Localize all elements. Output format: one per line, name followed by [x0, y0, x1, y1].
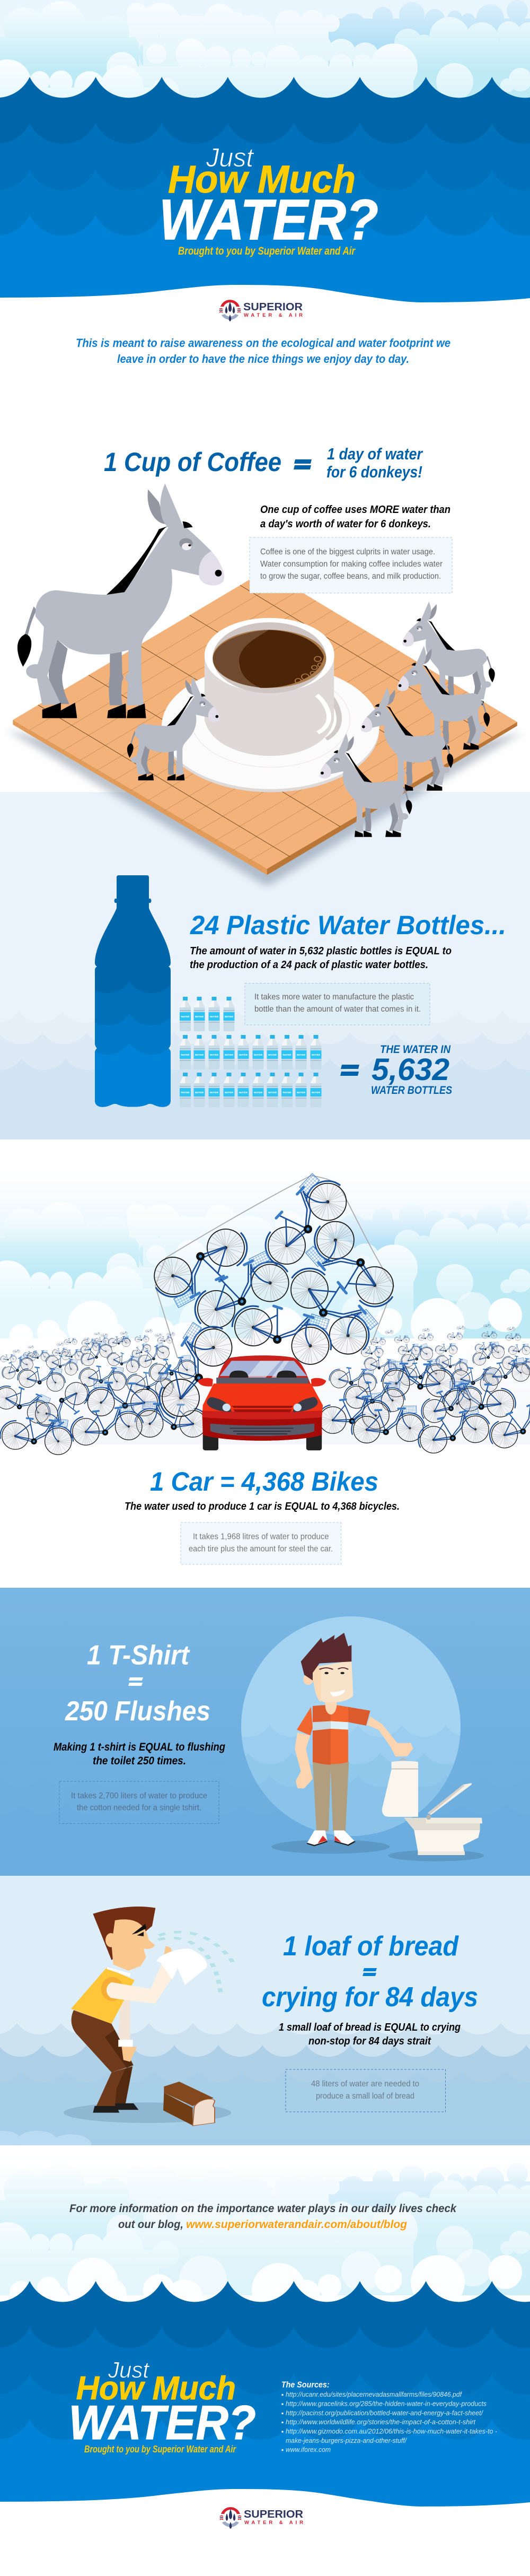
car section clouds — [0, 1198, 530, 1444]
coffee heading: for 6 donkeys! — [326, 463, 422, 481]
circle backdrop — [241, 1616, 461, 1836]
bread loaf — [163, 2082, 215, 2126]
title: Just — [206, 143, 254, 172]
callout: bottles: It takes more water to manufacture the plastic — [254, 993, 414, 1002]
near bike crowd — [0, 1361, 530, 1456]
toilet shadow — [388, 1850, 484, 1861]
placemat — [13, 570, 517, 875]
footer logo — [220, 2507, 304, 2529]
blog call to action: www.superiorwaterandair.com/about/blog — [186, 2218, 407, 2231]
saucer — [162, 664, 379, 792]
callout: t-shirt — [59, 1781, 219, 1824]
sources list: make-jeans-burgers-pizza-and-other-stuff/ — [286, 2437, 407, 2444]
footer title: Brought to you by Superior Water and Air — [84, 2444, 236, 2455]
bottles heading and text: The amount of water in 5,632 plastic bottles is EQUAL to — [190, 945, 452, 957]
bottles heading and text: the production of a 24 pack of plastic water bottles. — [190, 959, 428, 971]
sources list: http://www.gizmodo.com.au/2012/06/this-is-how-much-water-it-takes-to - — [286, 2427, 497, 2435]
blog call to action: out our blog, — [118, 2218, 183, 2231]
panel: bread background — [0, 1876, 530, 2145]
footer title: WATER? — [69, 2396, 256, 2450]
header sky and clouds — [0, 0, 530, 170]
bottles heading and text — [190, 910, 506, 971]
footer water waves — [0, 2281, 530, 2576]
title: How Much — [168, 158, 356, 201]
small donkey by the cup — [127, 677, 219, 780]
footer title: How Much — [76, 2370, 236, 2407]
coffee fact text: One cup of coffee uses MORE water than — [260, 504, 450, 516]
t-shirt text: Making 1 t-shirt is EQUAL to flushing — [54, 1741, 225, 1753]
icon: large water bottle — [95, 875, 171, 1107]
t-shirt text: 250 Flushes — [65, 1696, 210, 1727]
sources list — [281, 2381, 497, 2453]
blog call to action: For more information on the importance water plays in our daily lives check — [69, 2203, 457, 2215]
small bottles — [180, 997, 321, 1107]
bread text: 1 loaf of bread — [283, 1931, 459, 1962]
man — [71, 1907, 207, 2113]
callout: bread: produce a small loaf of bread — [316, 2092, 414, 2101]
small donkey 4 — [361, 687, 453, 791]
callout: coffee: to grow the sugar, coffee beans, and milk production. — [260, 572, 441, 581]
callout: car — [181, 1522, 341, 1564]
footer logo: SUPERIOR — [244, 2509, 304, 2520]
bread text: 1 small loaf of bread is EQUAL to crying — [279, 2022, 461, 2033]
car heading and text: 1 Car = 4,368 Bikes — [150, 1467, 378, 1496]
coffee fact text: a day's worth of water for 6 donkeys. — [260, 518, 431, 530]
footer logo: WATER & AIR — [244, 2520, 303, 2526]
sources list: The Sources: — [281, 2381, 330, 2390]
callout: car: It takes 1,968 litres of water to produce — [193, 1532, 329, 1542]
callout: t-shirt: It takes 2,700 liters of water to produce — [71, 1791, 207, 1800]
coffee heading — [104, 445, 423, 481]
small donkey 2 — [402, 602, 495, 705]
bottles stat: WATER BOTTLES — [371, 1084, 452, 1096]
icon: red car — [198, 1355, 326, 1450]
callout: bread: 48 liters of water are needed to — [311, 2079, 419, 2088]
man — [295, 1633, 413, 1846]
tear drops — [158, 1932, 233, 1996]
footer title — [69, 2357, 256, 2455]
logo: SUPERIOR — [243, 301, 303, 313]
panel: t-shirt background — [0, 1588, 530, 1876]
t-shirt text: the toilet 250 times. — [93, 1755, 186, 1767]
intro text: leave in order to have the nice things we enjoy day to day. — [117, 352, 409, 365]
coffee heading: 1 Cup of Coffee — [104, 447, 281, 477]
blog call to action — [69, 2203, 457, 2231]
coffee illustration — [7, 483, 522, 886]
sources list: http://www.gracelinks.org/285/the-hidden-water-in-everyday-products — [286, 2400, 487, 2408]
t-shirt text: 1 T-Shirt — [87, 1640, 190, 1671]
man shadow — [271, 1840, 390, 1853]
bottles stat: 5,632 — [372, 1052, 449, 1087]
sources list: http://www.worldwildlife.org/stories/the-impact-of-a-cotton-t-shirt — [286, 2418, 476, 2426]
car heading and text: The water used to produce 1 car is EQUAL to 4,368 bicycles. — [125, 1501, 400, 1512]
car heading and text — [125, 1467, 400, 1512]
toilet — [382, 1757, 482, 1855]
callout: t-shirt: the cotton needed for a single tshirt. — [77, 1804, 201, 1812]
header water waves — [0, 77, 530, 480]
intro text: This is meant to raise awareness on the ecological and water footprint we — [76, 336, 450, 350]
bread text: crying for 84 days — [262, 1982, 478, 2013]
sources list: http://ucanr.edu/sites/placernevadasmallfarms/files/90846.pdf — [286, 2391, 462, 2398]
bottles stat — [340, 1043, 452, 1096]
callout: bottles — [245, 984, 430, 1025]
callout: coffee — [250, 537, 452, 593]
logo — [219, 300, 303, 321]
title: Brought to you by Superior Water and Air — [178, 245, 356, 257]
title: WATER? — [159, 187, 378, 251]
intro text — [76, 336, 450, 365]
placemat shadow — [7, 730, 522, 886]
small donkey 3 — [398, 646, 490, 750]
bread text: non-stop for 84 days strait — [308, 2035, 431, 2047]
bike pile — [144, 1165, 403, 1425]
illustration: crying man and bread — [64, 1907, 233, 2126]
coffee cup — [205, 618, 337, 756]
coffee fact text — [260, 504, 450, 530]
large donkey — [17, 483, 224, 718]
sources list: http://pacinst.org/publication/bottled-water-and-energy-a-fact-sheet/ — [286, 2409, 484, 2417]
shadow — [64, 2102, 231, 2123]
coffee heading: 1 day of water — [327, 445, 423, 463]
callout: bottles: bottle than the amount of water that comes in it. — [254, 1005, 421, 1014]
footer title: Just — [108, 2357, 150, 2383]
t-shirt text — [54, 1640, 225, 1767]
sources list: www.iforex.com — [286, 2446, 331, 2453]
far bike crowd — [0, 1324, 530, 1398]
bottles stat: THE WATER IN — [380, 1043, 451, 1056]
bike pile outline — [155, 1176, 394, 1358]
logo: WATER & AIR — [244, 312, 303, 318]
callout: car: each tire plus the amount for steel the car. — [189, 1545, 333, 1553]
small donkey 5 — [320, 734, 412, 837]
bottles heading and text: 24 Plastic Water Bottles... — [190, 910, 506, 940]
title — [159, 143, 378, 257]
bread text — [262, 1931, 478, 2047]
callout: coffee: Coffee is one of the biggest culprits in water usage. — [260, 547, 435, 556]
callout: coffee: Water consumption for making coffee includes water — [260, 560, 443, 569]
panel: bottles background — [0, 792, 530, 1139]
footer clouds — [0, 2163, 530, 2295]
illustration: man and toilet — [271, 1633, 484, 1861]
callout: bread — [286, 2069, 445, 2112]
